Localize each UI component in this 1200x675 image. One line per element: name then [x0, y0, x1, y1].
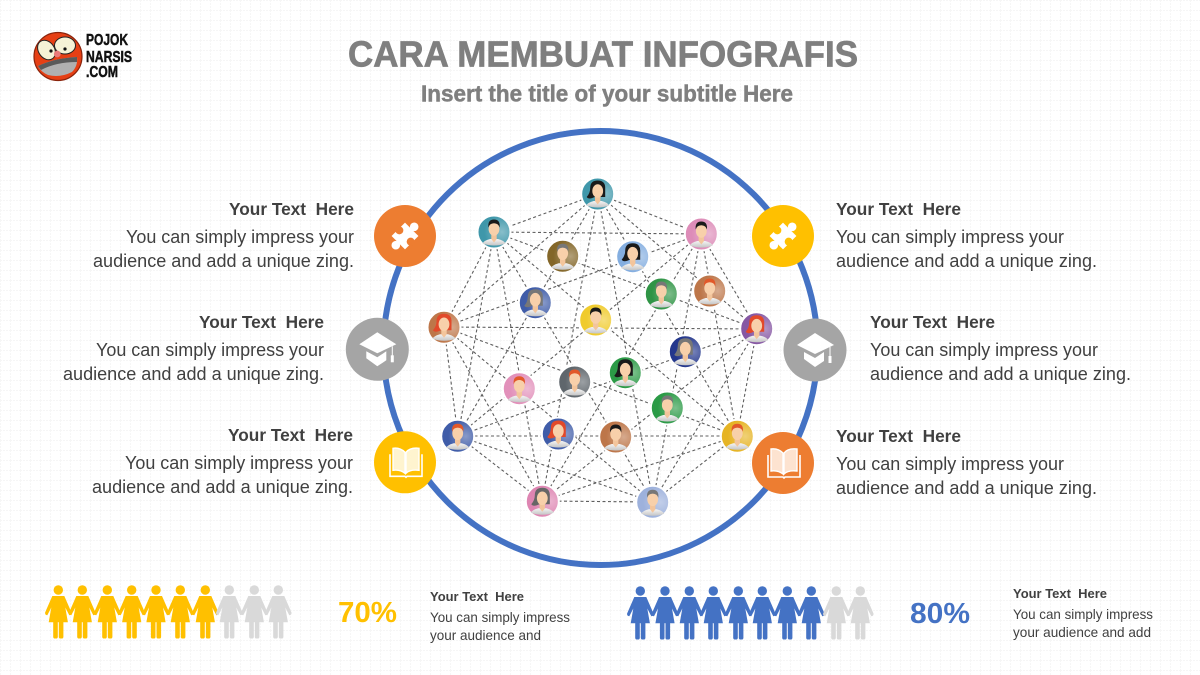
text block: right bottom: Your Text Here — [836, 426, 961, 446]
subtitle: Insert the title of your subtitle Here — [421, 81, 793, 107]
text block: left bottom: Your Text Here — [228, 425, 353, 445]
text block: bottom right: your audience and add — [1013, 624, 1151, 640]
text block: right middle: Your Text Here — [870, 312, 995, 332]
avatar network — [428, 178, 773, 519]
text block: right middle: You can simply impress your — [870, 340, 1098, 360]
avatar: tan man center — [599, 420, 632, 454]
avatar: green man — [645, 278, 678, 310]
text block: bottom left: Your Text Here — [430, 590, 524, 604]
text block: bottom right — [1013, 587, 1153, 640]
avatar: green woman — [609, 356, 642, 389]
logo: Pojok Narsis — [34, 32, 132, 81]
avatar: yellow man right — [721, 420, 754, 453]
icon: yellow puzzle right — [752, 205, 814, 267]
title: CARA MEMBUAT INFOGRAFIS — [348, 34, 858, 75]
pictogram: 80 percent people — [627, 586, 874, 640]
text block: bottom right: You can simply impress — [1013, 606, 1153, 622]
text block: bottom right: Your Text Here — [1013, 587, 1107, 601]
text block: right top: audience and add a unique zing. — [836, 251, 1097, 271]
text block: bottom left — [430, 590, 570, 643]
icon: yellow book left — [374, 431, 436, 493]
avatar: blue woman red hair — [542, 418, 575, 450]
logo wordmark — [86, 32, 132, 81]
text block: left middle: audience and add a unique zing. — [63, 364, 324, 384]
icon: gray mortarboard right — [784, 318, 846, 382]
icon: orange book right — [752, 432, 814, 494]
avatar: green man lower — [651, 392, 684, 424]
avatar: blue woman — [519, 286, 552, 319]
stat: 80%: 80% — [910, 598, 970, 630]
avatar: gray man — [558, 366, 591, 398]
stat: 70%: 70% — [338, 597, 397, 629]
logo wordmark: POJOK — [86, 32, 128, 49]
icon: gray mortarboard left — [346, 318, 409, 381]
icon: orange puzzle left — [374, 205, 436, 267]
avatar: yellow man — [579, 304, 612, 336]
logo mascot — [34, 32, 82, 80]
text block: left middle: Your Text Here — [199, 312, 324, 332]
avatar: pink man — [685, 218, 718, 250]
text block: left top: audience and add a unique zing. — [93, 251, 354, 271]
pictogram: 70 percent people — [45, 585, 292, 638]
text block: right top: You can simply impress your — [836, 227, 1064, 247]
text block: left top — [93, 199, 354, 271]
text block: left middle: You can simply impress your — [96, 340, 324, 360]
text block: right bottom — [836, 426, 1097, 498]
text block: right middle: audience and add a unique zing. — [870, 364, 1131, 384]
text block: bottom left: You can simply impress — [430, 609, 570, 625]
avatar: teal man — [478, 216, 510, 248]
text block: left top: Your Text Here — [229, 199, 354, 219]
avatar: periwinkle man bottom — [636, 486, 669, 519]
avatar: brown man — [546, 240, 579, 273]
text block: left bottom — [92, 425, 353, 497]
text block: right top — [836, 199, 1097, 271]
avatar: light blue woman — [616, 240, 649, 273]
avatar: tan man — [693, 274, 726, 308]
text block: left bottom: You can simply impress your — [125, 453, 353, 473]
avatar: blue man left — [441, 420, 474, 453]
logo wordmark: .COM — [86, 64, 118, 81]
avatar: pink man center — [503, 372, 536, 405]
text block: left bottom: audience and add a unique zing. — [92, 477, 353, 497]
avatar: tan woman — [428, 311, 460, 344]
text block: right middle — [870, 312, 1131, 384]
avatar: teal woman top — [581, 178, 614, 210]
avatar: navy woman — [669, 335, 702, 368]
avatar: pink woman bottom — [526, 485, 559, 518]
blue ring — [384, 131, 818, 565]
text block: left middle — [63, 312, 324, 384]
text block: right bottom: You can simply impress your — [836, 454, 1064, 474]
text block: right bottom: audience and add a unique zing. — [836, 478, 1097, 498]
text block: right top: Your Text Here — [836, 199, 961, 219]
logo wordmark: NARSIS — [86, 49, 132, 66]
text block: left top: You can simply impress your — [126, 227, 354, 247]
avatar: purple woman — [740, 312, 773, 345]
text block: bottom left: your audience and — [430, 627, 541, 643]
network connection lines — [444, 194, 757, 502]
